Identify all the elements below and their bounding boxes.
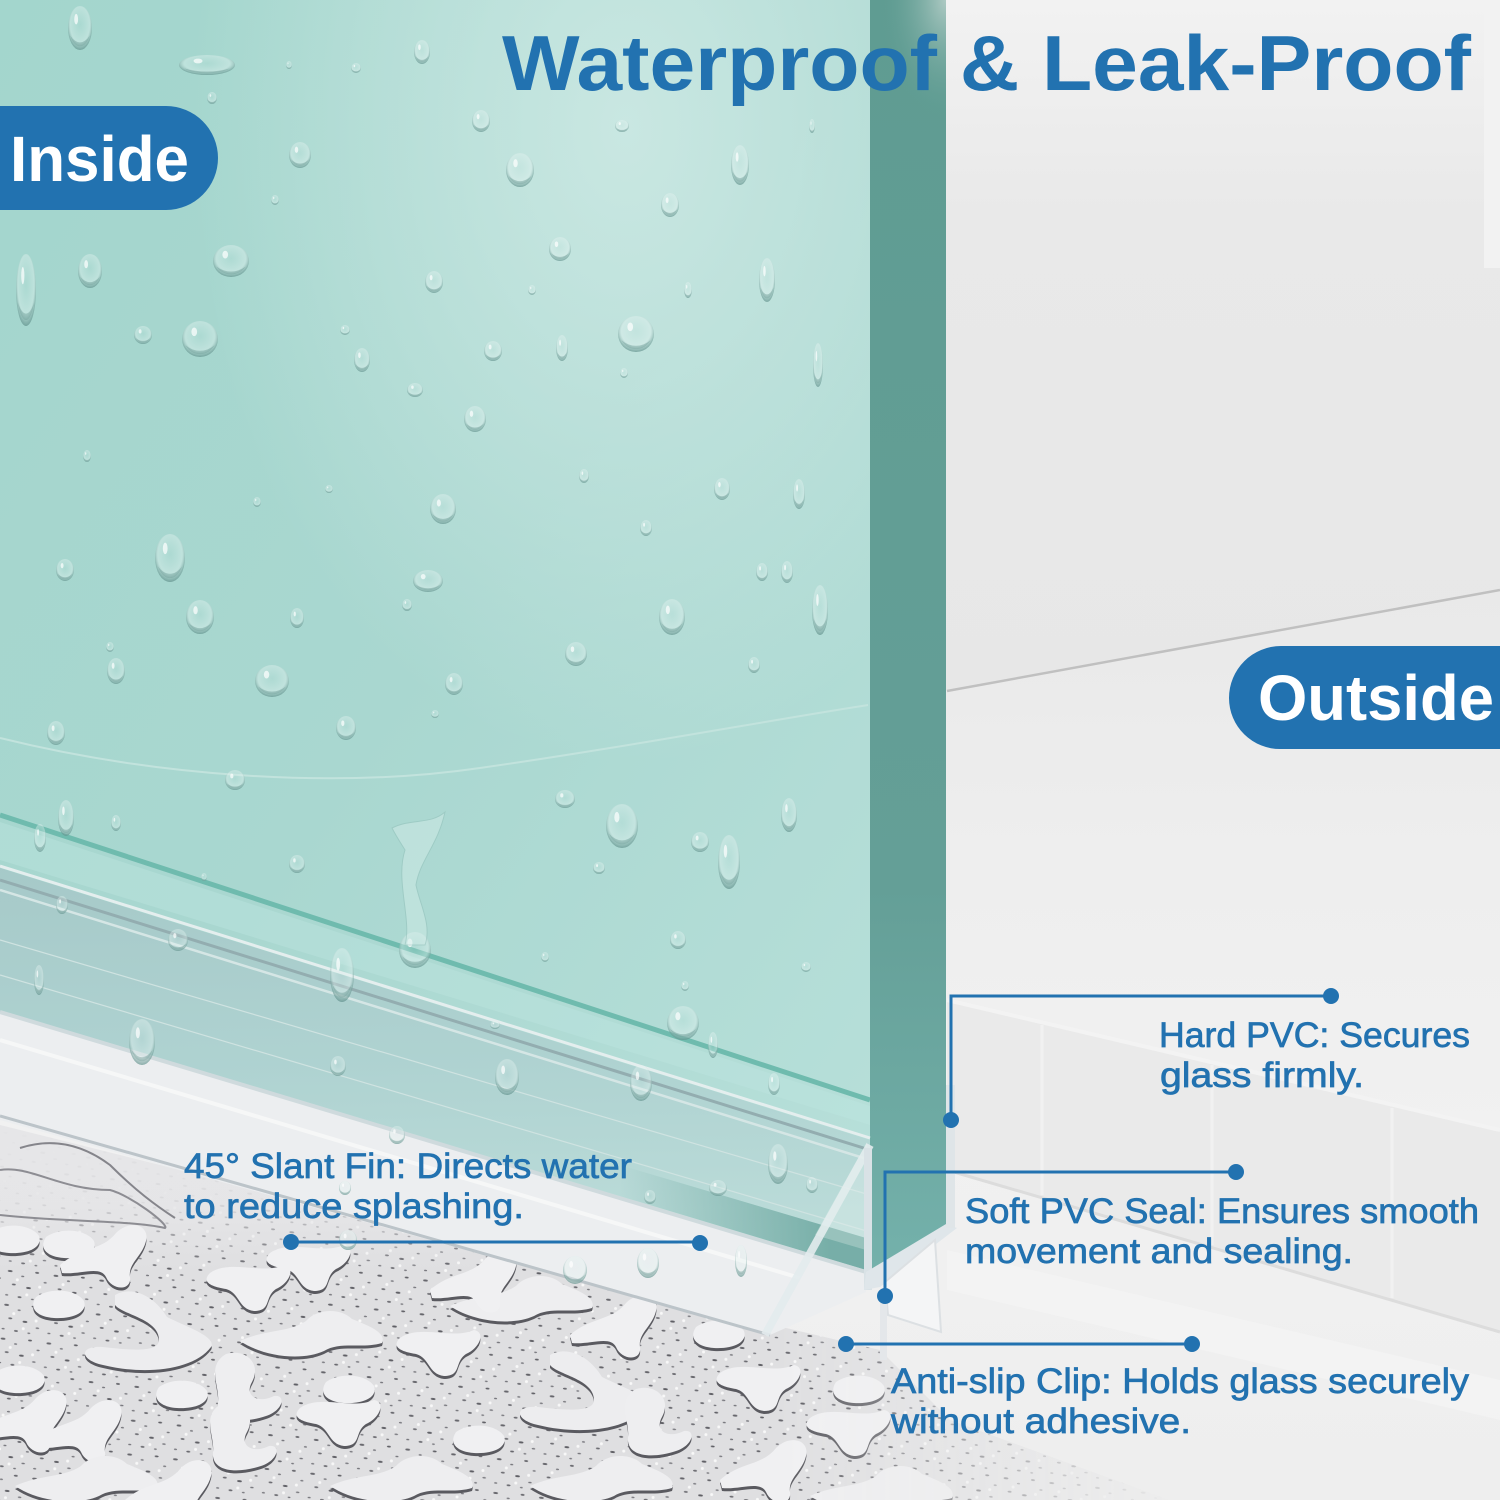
- callout: Hard PVC: glass firmly.: [1160, 1056, 1364, 1095]
- callout: Hard PVC: [943, 988, 1470, 1128]
- callout: Anti-slip Clip: without adhesive.: [890, 1402, 1191, 1441]
- wet floor with water puddles: [0, 1100, 1180, 1500]
- callout: Soft PVC Seal: movement and sealing.: [965, 1232, 1353, 1271]
- glass side edge: [870, 0, 946, 1270]
- badge: Inside: Inside: [10, 123, 189, 195]
- badge: Inside: [0, 106, 218, 210]
- background: wall light panel: [1484, 0, 1500, 268]
- callout: 45 degree Slant Fin: to reduce splashing.: [184, 1187, 524, 1226]
- background: wall: [940, 0, 1500, 700]
- wall and floor joint: [947, 590, 1500, 691]
- badge: Outside: Outside: [1258, 662, 1494, 734]
- callout: Anti-slip Clip: [838, 1336, 1470, 1441]
- title: Waterproof & Leak-Proof: [502, 19, 1472, 107]
- callout: Soft PVC Seal: Soft PVC Seal: Ensures smooth: [965, 1192, 1479, 1231]
- transparent clip and slanted fin: [765, 1085, 957, 1360]
- badge: Outside: [1229, 646, 1500, 749]
- raised step with tiles: [947, 1000, 1500, 1420]
- transparent seal strip: [0, 866, 870, 1335]
- background: floor: [0, 590, 1500, 1500]
- callout: Soft PVC Seal: [877, 1164, 1479, 1304]
- callout: Hard PVC: Hard PVC: Secures: [1159, 1016, 1470, 1055]
- glass front face: [0, 0, 870, 1275]
- callout: Anti-slip Clip: Anti-slip Clip: Holds glass securely: [891, 1362, 1470, 1401]
- callout: 45 degree Slant Fin: [184, 1147, 708, 1251]
- water drops on glass: [16, 6, 828, 1284]
- callout: 45 degree Slant Fin: 45° Slant Fin: Directs water: [184, 1147, 632, 1186]
